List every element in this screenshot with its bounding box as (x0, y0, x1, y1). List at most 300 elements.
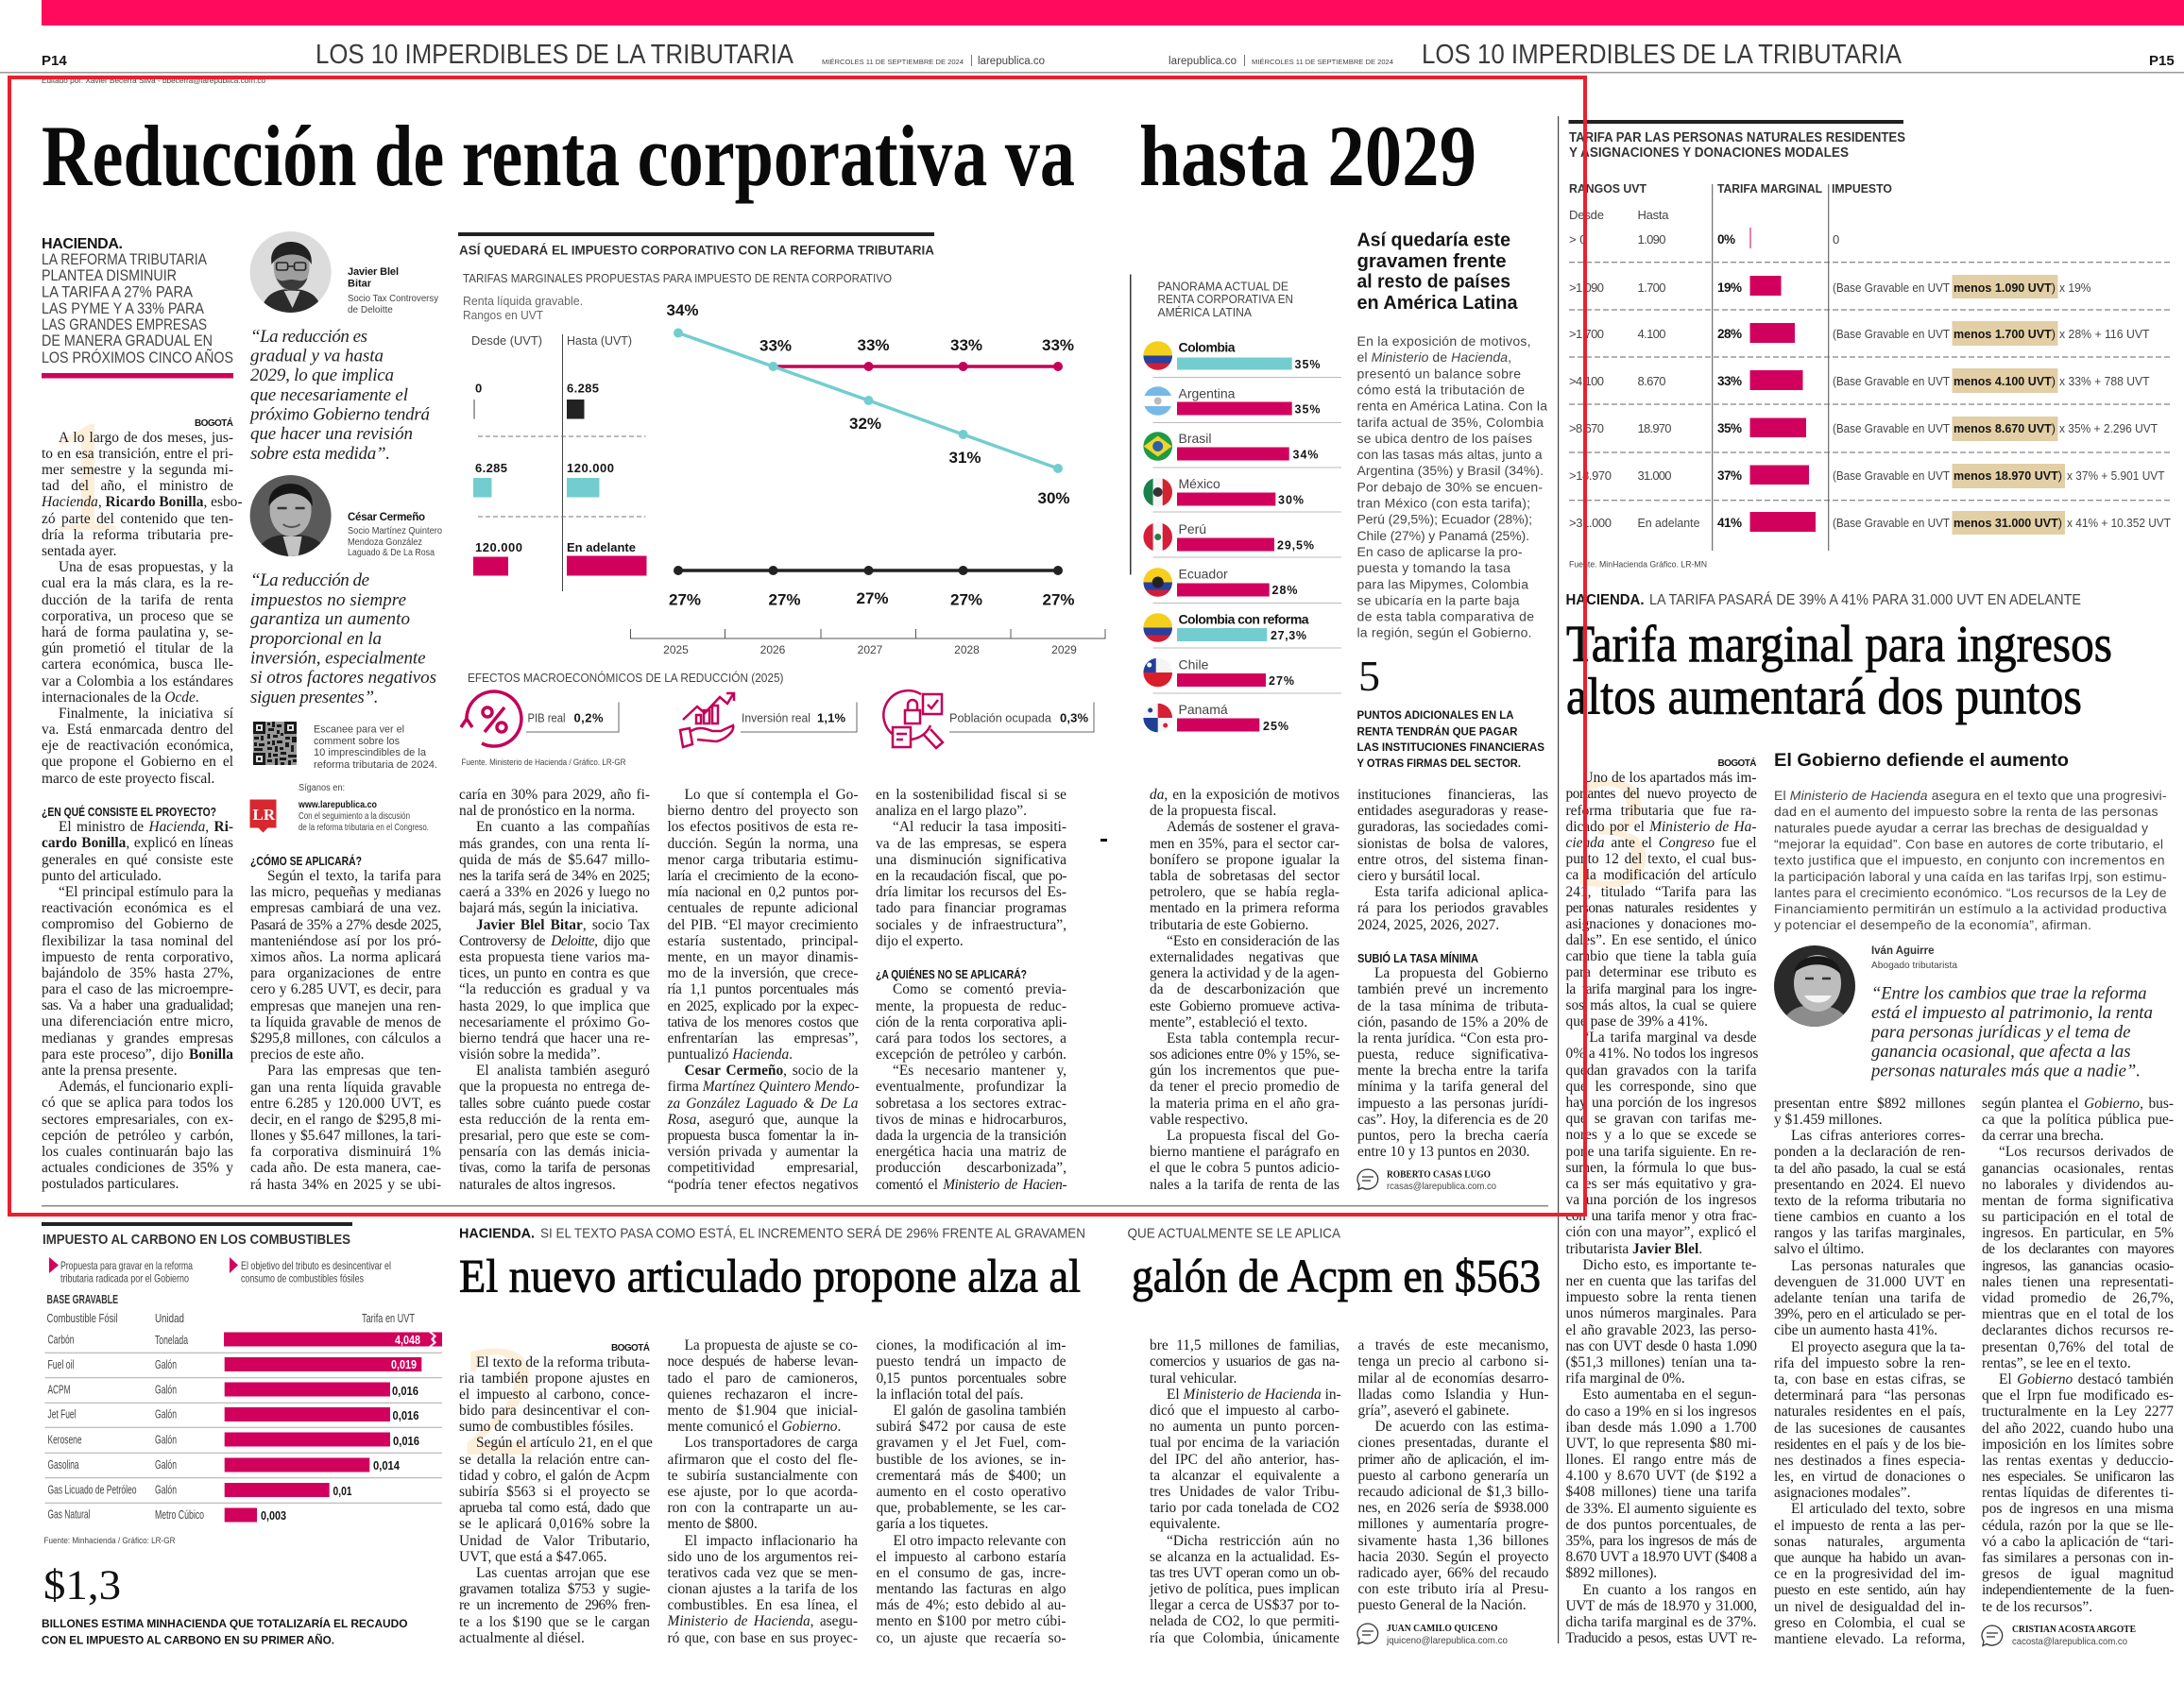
photo: Iván Aguirre (1773, 945, 1856, 1028)
carbon values: 0,01 (333, 1484, 351, 1498)
byline: Juan Camilo Quiceno: JUAN CAMILO QUICENO (1387, 1624, 1498, 1634)
LR logo (249, 799, 276, 833)
kicker: hacienda: PLANTEA DISMINUIR (42, 267, 177, 284)
range table: 0 (475, 382, 482, 395)
carbon bars (224, 1332, 442, 1523)
byline: César Cermeño: César Cermeño (348, 512, 425, 523)
article column 3: En cuanto a las compañías (476, 819, 650, 835)
ranges: 8.670 (1638, 374, 1666, 388)
article column A: tarifa marginal: ca la modificación del artículo (1566, 867, 1757, 883)
carbon labels: Gas Natural (47, 1507, 91, 1521)
article column B: tarifa marginal: presentan entre $892 millones (1774, 1096, 1965, 1112)
kicker: hacienda: LAS PYME Y A 33% PARA (42, 300, 204, 317)
panel: personal income tariff table (1568, 120, 2171, 570)
article column A: tarifa marginal: 8.670 UVT a 18.970 UVT ($408 a (1566, 1549, 1757, 1565)
text block: comparison paragraph: En caso de aplicarse la pro- (1356, 544, 1523, 559)
kicker: hacienda: HACIENDA. (42, 236, 123, 252)
article column 1: que propone el Gobierno en el (42, 754, 233, 770)
article column B: tarifa marginal: naturales residentes en el país, (1774, 1404, 1965, 1420)
article column H: carbon: hacia 2030. Según el proyecto (1358, 1549, 1549, 1565)
article column 3: Javier Blel Bitar, socio Tax (476, 917, 650, 933)
formula column: x 37% + 5.901 UVT (2067, 468, 2165, 483)
article column E: carbon: terativos cada vez que se men- (667, 1565, 858, 1581)
article column C: tarifa marginal: nales tienen una representati- (1982, 1274, 2174, 1290)
article column C: tarifa marginal: fas similares a personas con in- (1982, 1550, 2174, 1566)
article column A: tarifa marginal: ner en cuenta que las tarifas del (1566, 1273, 1757, 1289)
article column 6: nales a la tarifa de renta de las (1150, 1177, 1339, 1193)
article column 1: postulados particulares. (42, 1176, 179, 1192)
quote: Javier Blel: “La reducción es (250, 327, 367, 347)
range table: 6.285 (475, 461, 507, 475)
line chart: 33% (759, 336, 792, 355)
article column B: tarifa marginal (1774, 1096, 1966, 1647)
kicker: carbon article: HACIENDA. (459, 1226, 535, 1241)
ink mark (1101, 839, 1107, 842)
article column A: tarifa marginal: Traducido a pesos, estas UVT re- (1566, 1630, 1757, 1646)
article column C: tarifa marginal: declarantes dichos recursos re- (1982, 1322, 2174, 1338)
article column 2: ximos años. La norma aplicará (250, 949, 441, 965)
article column 6: Además de sostener el grava- (1167, 819, 1339, 835)
article column 3: necesariamente el próximo Go- (459, 1014, 650, 1030)
line chart: 32% (849, 415, 881, 433)
article column C: tarifa marginal: las rentas exentas y deduccio- (1982, 1453, 2174, 1469)
country labels: Perú (1179, 521, 1206, 536)
carbon table headers: BASE GRAVABLE (47, 1293, 118, 1306)
article column C: tarifa marginal: pos de ingresos en una misma (1982, 1501, 2174, 1517)
article column F: carbon: aumento en el costo operativo (877, 1484, 1066, 1500)
quote: Javier Blel: 2029, lo que implica (250, 366, 394, 385)
article column 1: bajándolo de 35% hasta 27%, (42, 965, 233, 981)
article column A: tarifa marginal: ca es ser más equitativo y gra- (1566, 1176, 1757, 1192)
article column 7 (1357, 787, 1548, 1160)
line chart: 31% (948, 449, 981, 467)
formula column: (Base Gravable en UVT (1833, 468, 1950, 483)
article column F: carbon: subirá $472 por causa de este (877, 1419, 1066, 1435)
quote: Javier Blel: que hacer una revisión (250, 424, 413, 444)
rate bars: 28% (1717, 327, 1742, 341)
carbon labels: Galón (155, 1358, 177, 1371)
follow caption: Síganos en: (299, 783, 345, 793)
article column A: tarifa marginal: asignaciones y donaciones mo- (1566, 916, 1757, 932)
article column D: carbon: el impuesto al carbono, conce- (459, 1387, 650, 1403)
article column 6: La propuesta fiscal del Go- (1167, 1128, 1339, 1144)
article column 1: A lo largo de dos meses, jus- (59, 430, 233, 446)
icon: percent cycle (461, 691, 521, 746)
article column F: carbon: puesto tendrá un impacto de (877, 1353, 1066, 1370)
photo: César Cermeño (249, 474, 333, 557)
stat: Inversión real: 1,1% (817, 710, 845, 725)
rate bars (1717, 228, 1816, 532)
text block: comparison paragraph: Por debajo de 30% se encuen- (1356, 479, 1543, 494)
article column A: tarifa marginal: rifa marginal de 0%. (1566, 1370, 1685, 1387)
article column 6: da de descarbonización que (1150, 981, 1339, 997)
country labels: Panamá (1179, 702, 1228, 717)
article column C: tarifa marginal: “Los recursos derivados de (1999, 1144, 2174, 1160)
article column 5: una disminución significativa (876, 852, 1066, 868)
article column C: tarifa marginal: independientemente de la fuen- (1982, 1582, 2174, 1598)
chart title: ASÍ QUEDARÁ EL IMPUESTO CORPORATIVO CON LA REFORMA TRIBUTARIA (459, 242, 934, 257)
article column 6: externalidades negativas que (1150, 949, 1339, 965)
article column C: tarifa marginal: ca que la política pública pue- (1982, 1112, 2174, 1128)
article column C: tarifa marginal: de los declarantes con mayores (1982, 1241, 2174, 1257)
article column A: tarifa marginal: portantes del nuevo proyecto de (1566, 786, 1757, 802)
byline: Iván Aguirre (1871, 945, 1957, 971)
article column H: carbon: puesto General de la Nación. (1358, 1597, 1527, 1613)
country labels: México (1179, 476, 1220, 491)
kicker: hacienda: LOS PRÓXIMOS CINCO AÑOS (42, 348, 233, 366)
article column 1: El ministro de Hacienda, Ri- (59, 819, 233, 835)
article column A: tarifa marginal: $408 millones) tiene una tarifa (1566, 1484, 1757, 1500)
article column 4: estaría sustentado, principal- (667, 933, 858, 949)
kicker: hacienda: DE MANERA GRADUAL EN (42, 332, 213, 349)
rate bars: 37% (1717, 468, 1742, 483)
article column 1: Además, el funcionario expli- (59, 1079, 233, 1095)
article column F: carbon: ciones, la modificación al im- (877, 1337, 1066, 1353)
article column A: tarifa marginal: de 33%. El aumento siguiente es (1566, 1501, 1757, 1517)
article column G: carbon: El Ministerio de Hacienda in- (1167, 1387, 1341, 1403)
formula column: x 28% + 116 UVT (2059, 327, 2150, 341)
article column B: tarifa marginal: cibe un aumento hasta 41%. (1774, 1322, 1937, 1338)
article column 6: petrolero, que se había regla- (1150, 884, 1339, 900)
article column F: carbon: el impuesto al carbono estaría (877, 1549, 1066, 1565)
country values: 35% (1294, 402, 1321, 416)
article column 5: cará para todos los sectores, a (876, 1030, 1066, 1047)
article column 5: energética hacia una matriz de (876, 1144, 1066, 1160)
article column 1: sas. Va a haber una gradualidad; (42, 997, 233, 1013)
article column G: carbon: tario por cada tonelada de CO2 (1150, 1500, 1339, 1516)
article column H: carbon: milar al de economías desarro- (1358, 1370, 1549, 1387)
article column 3: El analista también aseguró (476, 1063, 650, 1079)
callout: 5 puntos: PUNTOS ADICIONALES EN LA (1356, 710, 1513, 722)
article column H: carbon: ciones presentadas, durante el (1358, 1435, 1549, 1451)
QR code (253, 722, 297, 765)
article column B: tarifa marginal: mantiene elevado. La reforma, (1774, 1631, 1965, 1647)
article column 4: puntualizó Hacienda. (667, 1047, 793, 1063)
article column 1: sentada ayer. (42, 543, 116, 559)
carbon labels: Galón (155, 1383, 177, 1396)
article column 3: bajará más, según la iniciativa. (459, 900, 639, 916)
article column A: tarifa marginal: llones. El rango entre más de (1566, 1452, 1757, 1468)
article column G: carbon: no aumenta un punto porcen- (1150, 1419, 1339, 1435)
subheads: ¿EN QUÉ CONSISTE EL PROYECTO? (42, 805, 216, 819)
text block: comparison paragraph: puesta y tomando la tasa (1356, 560, 1510, 575)
article column A: tarifa marginal: Dicho esto, es importante te- (1583, 1257, 1757, 1273)
callout: $1,3: BILLONES ESTIMA MINHACIENDA QUE TOTALIZARÍA EL RECAUDO (42, 1618, 408, 1630)
article column 4: za González Laguado & De La (667, 1096, 858, 1112)
article column A: tarifa marginal: iban desde más 1.090 a 1.700 (1566, 1420, 1757, 1436)
article column B: tarifa marginal: puesto en este sentido, aún hay (1774, 1582, 1965, 1598)
heading: comparison text: al resto de países (1356, 272, 1510, 293)
carbon title: IMPUESTO AL CARBONO EN LOS COMBUSTIBLES (43, 1233, 350, 1248)
article column H: carbon: sivamente hasta 1,36 billones (1358, 1533, 1549, 1549)
article column H: carbon: lladas como Islandia y Hun- (1358, 1387, 1549, 1403)
stat: Población ocupada: 0,3% (1060, 710, 1088, 725)
quote: César Cermeño: si otros factores negativos (250, 668, 436, 688)
article column D: carbon: aprueba tal como está, dado que (459, 1500, 650, 1516)
article column D: carbon: El texto de la reforma tributa- (476, 1354, 650, 1370)
article column 7: rá para los periodos gravables (1357, 900, 1548, 916)
country values: 34% (1292, 448, 1319, 461)
article column 6: mente”, estableció el texto. (1150, 1014, 1307, 1030)
article column A: tarifa marginal: Esto aumentaba en el segun- (1583, 1387, 1757, 1403)
article column 7: puntos, pero la brecha caería (1357, 1128, 1548, 1144)
article column D: carbon (459, 1354, 653, 1646)
article column 4: propuesta busca fomentar la in- (667, 1128, 858, 1144)
article column D: carbon: Según el artículo 21, en el que (476, 1435, 653, 1451)
follow caption: Con el seguimiento a la discusión (299, 811, 410, 822)
article column A: tarifa marginal: nas con UVT desde 0 hasta 1.090 (1566, 1338, 1757, 1354)
rate bars: 41% (1717, 516, 1742, 530)
subheads: ¿CÓMO SE APLICARÁ? (250, 854, 362, 868)
text block: comparison paragraph: con las tasas más altas, junto a (1356, 447, 1543, 462)
kicker: tarifa marginal: HACIENDA. (1566, 592, 1644, 608)
article column 1: internacionales de la Ocde. (42, 689, 199, 706)
main title: hasta 2029 (1139, 108, 1476, 204)
article column A: tarifa marginal: Uno de los apartados más im- (1583, 770, 1757, 786)
article column B: tarifa marginal: residentes en el país y de los bie- (1774, 1437, 1965, 1453)
article column 1: “El principal estímulo para la (59, 884, 233, 900)
article column G: carbon: ta alcanzar el equivalente a (1150, 1468, 1339, 1484)
article column D: carbon: te a los $190 que se le cargan (459, 1613, 650, 1630)
article column F: carbon: co, un ajuste que recaería so- (877, 1630, 1066, 1646)
article column 1: var a Colombia a los estándares (42, 672, 233, 689)
article column H: carbon: con este tributo iría al Presu- (1358, 1581, 1549, 1597)
text block: comparison paragraph: En la exposición de motivos, (1356, 333, 1530, 349)
carbon labels: Gas Licuado de Petróleo (47, 1483, 137, 1496)
article column B: tarifa marginal: que aunque ha habido un avan- (1774, 1550, 1965, 1566)
article column H: carbon: gría”, aseveró el gabinete. (1358, 1403, 1510, 1419)
article column 7: mínima y la tarifa general del (1357, 1079, 1548, 1095)
byline: Roberto Casas Lugo (1357, 1169, 1496, 1192)
article column C: tarifa marginal (1982, 1096, 2174, 1615)
formula column: 0 (1833, 232, 1839, 247)
article column 1: los cuales continuarán bajo las (42, 1144, 233, 1160)
article column 2 (250, 868, 441, 1193)
article column 1: medianas y grandes empresas (42, 1030, 233, 1047)
carbon labels: Metro Cúbico (155, 1508, 204, 1522)
formula column: menos 31.000 UVT) (1954, 516, 2062, 530)
article column A: tarifa marginal: va una porción de los ingresos (1566, 1192, 1757, 1208)
article column 5: excepción de petróleo y carbón. (876, 1047, 1066, 1063)
article column C: tarifa marginal: te de los recursos”. (1982, 1599, 2092, 1615)
article column 3: caerá a 33% en 2026 y luego no (459, 884, 650, 900)
formula column: menos 8.670 UVT) (1954, 421, 2056, 435)
article column 2: fa corporativa disminuirá 1% (250, 1144, 441, 1160)
article column 3: caría en 30% para 2029, año fi- (459, 787, 650, 803)
article column D: carbon: bido para desincentivar el con- (459, 1403, 650, 1419)
kicker: carbon article (459, 1226, 1340, 1241)
top pink band (42, 0, 2184, 26)
article column D: carbon: se le aplicará 0,016% sobre la (459, 1516, 650, 1532)
carbon values: 0,016 (393, 1408, 419, 1422)
country labels: Chile (1179, 657, 1209, 672)
article column 1: zó parte del contenido que ten- (42, 511, 233, 527)
table title: TARIFA PAR LAS PERSONAS NATURALES RESIDENTES (1569, 130, 1905, 145)
formula column: x 41% + 10.352 UVT (2067, 516, 2171, 530)
byline: César Cermeño: Mendoza González (348, 537, 422, 548)
page header: MIÉRCOLES 11 DE SEPTIEMBRE DE 2024 (822, 58, 964, 66)
article column 5: mente, la propuesta de reduc- (876, 998, 1066, 1014)
flag: Ecuador (1143, 567, 1173, 597)
page header: Editado por: Xavier Becerra Silva - bbecerra@larepublica.com.co (42, 77, 266, 85)
article column B: tarifa marginal: y $1.459 millones. (1774, 1112, 1883, 1128)
article column C: tarifa marginal: que el Irpn fue modificado es- (1982, 1387, 2174, 1404)
line chart (631, 301, 1105, 656)
line chart: 2026 (760, 643, 786, 656)
article column 1: Una de esas propuestas, y la (59, 559, 233, 575)
article column G: carbon: tural vehicular. (1150, 1370, 1237, 1387)
kicker: hacienda: LA REFORMA TRIBUTARIA (42, 251, 207, 268)
text block: comparison paragraph: Chile (27%) y Panamá (25%). (1356, 528, 1529, 543)
carbon values: 0,016 (393, 1434, 419, 1448)
headline: tarifa marginal (1566, 615, 2112, 725)
byline: Roberto Casas Lugo: rcasas@larepublica.com.co (1387, 1181, 1496, 1192)
article column B: tarifa marginal: ce en la progresividad del im- (1774, 1566, 1965, 1582)
article column 4: los efectos positivos de esta re- (667, 819, 858, 835)
article column F: carbon: 0,15 puntos porcentuales sobre (877, 1370, 1066, 1387)
article column B: tarifa marginal: les, en virtud de donaciones o (1774, 1469, 1965, 1485)
quote: César Cermeño: “La reducción de (250, 570, 369, 590)
article column 6: bierno mantiene el parágrafo en (1150, 1144, 1339, 1160)
article column A: tarifa marginal: En cuanto a los rangos en (1583, 1582, 1757, 1598)
article column 1: corporativa, un proceso que se (42, 608, 233, 624)
article column E: carbon: Ministerio de Hacienda, asegu- (667, 1613, 858, 1629)
chart panel: corporate tax (458, 232, 1105, 767)
article column 4: competitividad empresarial, (667, 1160, 858, 1176)
formula column: (Base Gravable en UVT (1833, 421, 1950, 435)
article column 5: en la sostenibilidad fiscal si se (876, 787, 1066, 803)
article column 1: có que se aplica para todos los (42, 1095, 233, 1111)
article column E: carbon: mente comunicó el Gobierno. (667, 1419, 841, 1435)
table headers (1569, 181, 1892, 222)
QR caption (314, 723, 437, 771)
article column C: tarifa marginal: su participación en el total de (1982, 1209, 2174, 1225)
byline: Javier Blel (348, 266, 438, 315)
article column 4: enfrentarían las empresas”, (667, 1030, 858, 1047)
article column C: tarifa marginal: nes especiales. Se unificaron las (1982, 1469, 2174, 1485)
article column 6: tributaria de este Gobierno. (1150, 917, 1308, 933)
carbon table headers (47, 1293, 415, 1325)
article column 6: bonífero se propone igualar la (1150, 852, 1339, 868)
callout: $1,3: CON EL IMPUESTO AL CARBONO EN SU PRIMER AÑO. (42, 1634, 334, 1647)
article column B: tarifa marginal: Las cifras anteriores corres- (1791, 1128, 1965, 1144)
line chart: 33% (1042, 336, 1074, 354)
range table (463, 295, 646, 591)
page header: P14 (42, 53, 67, 69)
kicker: hacienda: LA TARIFA A 27% PARA (42, 283, 193, 300)
line chart: 30% (1037, 489, 1070, 507)
line chart: 27% (856, 589, 889, 607)
country labels: Brasil (1179, 431, 1212, 446)
article column 1: para este proceso”, dijo Bonilla (42, 1047, 233, 1063)
article column 1: cepción de petróleo y carbón, (42, 1128, 233, 1144)
formula column: x 19% (2059, 281, 2091, 295)
article column 7: también prevé un incremento (1357, 981, 1548, 997)
article column 7: cas”. Hoy, la diferencia es de 20 (1357, 1112, 1548, 1128)
article column D: carbon: se detalla la relación entre can- (459, 1452, 650, 1468)
text block: Gobierno defiende: lantes para el crecimiento económico. “Los recursos de la Ley de (1774, 885, 2167, 900)
article column A: tarifa marginal: que pase de 39% a 41%. (1566, 1013, 1708, 1030)
article column G: carbon: jetivo de política, pues implican (1150, 1581, 1339, 1597)
article column 4: versión privada y aumentar la (667, 1144, 858, 1160)
article column E: carbon: afirmaron que el costo del fle- (667, 1452, 858, 1468)
ranges: >4.100 (1569, 374, 1604, 388)
line chart: 27% (1042, 591, 1075, 608)
article column 1: cual era la más clara, es la re- (42, 575, 233, 591)
article column C: tarifa marginal: mientras que en el total de los (1982, 1306, 2174, 1322)
quote: César Cermeño: siguen presentes”. (250, 688, 378, 707)
article column 1: ante la prensa presente. (42, 1063, 178, 1079)
article column 6: tabla de sobretasas del sector (1150, 868, 1339, 884)
article column A: tarifa marginal: sumen, la fórmula lo que bus- (1566, 1160, 1757, 1176)
article column F: carbon: crementará más de $400; un (877, 1468, 1066, 1484)
article column 6: men en 35%, para el sector car- (1150, 836, 1339, 852)
article column 3: hasta 2029, lo que implica que (459, 998, 650, 1014)
article column C: tarifa marginal: del año 2022, cuando hubo una (1982, 1421, 2174, 1437)
article column 4 (667, 787, 860, 1193)
text block: Gobierno defiende: El Ministerio de Hacienda asegura en el texto que una progresivi- (1774, 788, 2167, 803)
article column 7: La propuesta del Gobierno (1374, 965, 1548, 981)
text block: comparison paragraph: Argentina (35%) y Brasil (34%). (1356, 463, 1544, 478)
article column A: tarifa marginal: impuesto sobre la renta tienen (1566, 1289, 1757, 1305)
flag: Argentina (1143, 385, 1173, 416)
ranges: En adelante (1638, 516, 1700, 530)
article column 2: entre 6.285 y 120.000 UVT, es (250, 1096, 441, 1112)
article column D: carbon: subiría $563 si el proyecto se (459, 1484, 650, 1500)
text block: Gobierno defiende: y potenciar el desempeño de la economía”, afirman. (1774, 917, 2091, 932)
article column A: tarifa marginal: dicado por el Ministerio de Ha- (1566, 819, 1757, 835)
page header (0, 40, 2184, 85)
ranges: >18.970 (1569, 468, 1612, 483)
article column 3 (459, 787, 650, 1193)
stat: Inversión real: Inversión real (742, 710, 810, 725)
LR logo: LR (253, 806, 276, 824)
article column 1: tad del año, el ministro de (42, 478, 233, 494)
article column C: tarifa marginal: gresos de igual magnitud (1982, 1566, 2174, 1582)
text block: comparison paragraph: tran México (con esta tarifa); (1356, 495, 1530, 510)
article column A: tarifa marginal: con una tarifa menor y otra frac- (1566, 1208, 1757, 1224)
country labels: Argentina (1179, 385, 1236, 400)
article column 1: va. Está enmarcada dentro del (42, 722, 233, 738)
text block: comparison paragraph: se ubica dentro de los países (1356, 431, 1532, 446)
ranges: > 0 (1569, 232, 1586, 247)
line chart: 27% (669, 591, 701, 608)
article column 1: flexibilizar la tasa nominal del (42, 933, 233, 948)
article column G: carbon: del IPC del año anterior, has- (1150, 1452, 1339, 1468)
article column A: tarifa marginal (1566, 770, 1758, 1646)
article column 2: para organizaciones de entre (250, 965, 441, 981)
article column C: tarifa marginal: no laborales y dividendos au- (1982, 1177, 2174, 1193)
callout: 5 puntos: 5 (1358, 652, 1380, 700)
article column H: carbon: a través de este mecanismo, (1358, 1337, 1549, 1353)
panel: Latin America ranking (1130, 274, 1341, 733)
carbon labels: Tonelada (155, 1334, 188, 1347)
article column B: tarifa marginal: tiene cambios en cuanto a los (1774, 1209, 1965, 1225)
ghost numerals (45, 387, 1652, 1489)
range table: Rangos en UVT (463, 309, 543, 322)
article column B: tarifa marginal: ta del año pasado, la cual se está (1774, 1161, 1965, 1177)
ranges: >8.670 (1569, 421, 1604, 435)
quote: Iván Aguirre (1869, 984, 2153, 1081)
article column 5: comentó el Ministerio de Hacien- (876, 1177, 1066, 1193)
article column B: tarifa marginal: devenguen de 31.000 UVT en (1774, 1274, 1965, 1290)
article column 4: “podría tener efectos negativos (667, 1177, 858, 1193)
page header: P15 (2149, 53, 2175, 69)
country values: 35% (1294, 358, 1321, 371)
article column 1: cardo Bonilla, explicó en líneas (42, 835, 233, 851)
article column 3: esta propuesta tiene varios ma- (459, 949, 650, 965)
text block: comparison paragraph: de esta tabla comparativa de (1356, 609, 1534, 624)
